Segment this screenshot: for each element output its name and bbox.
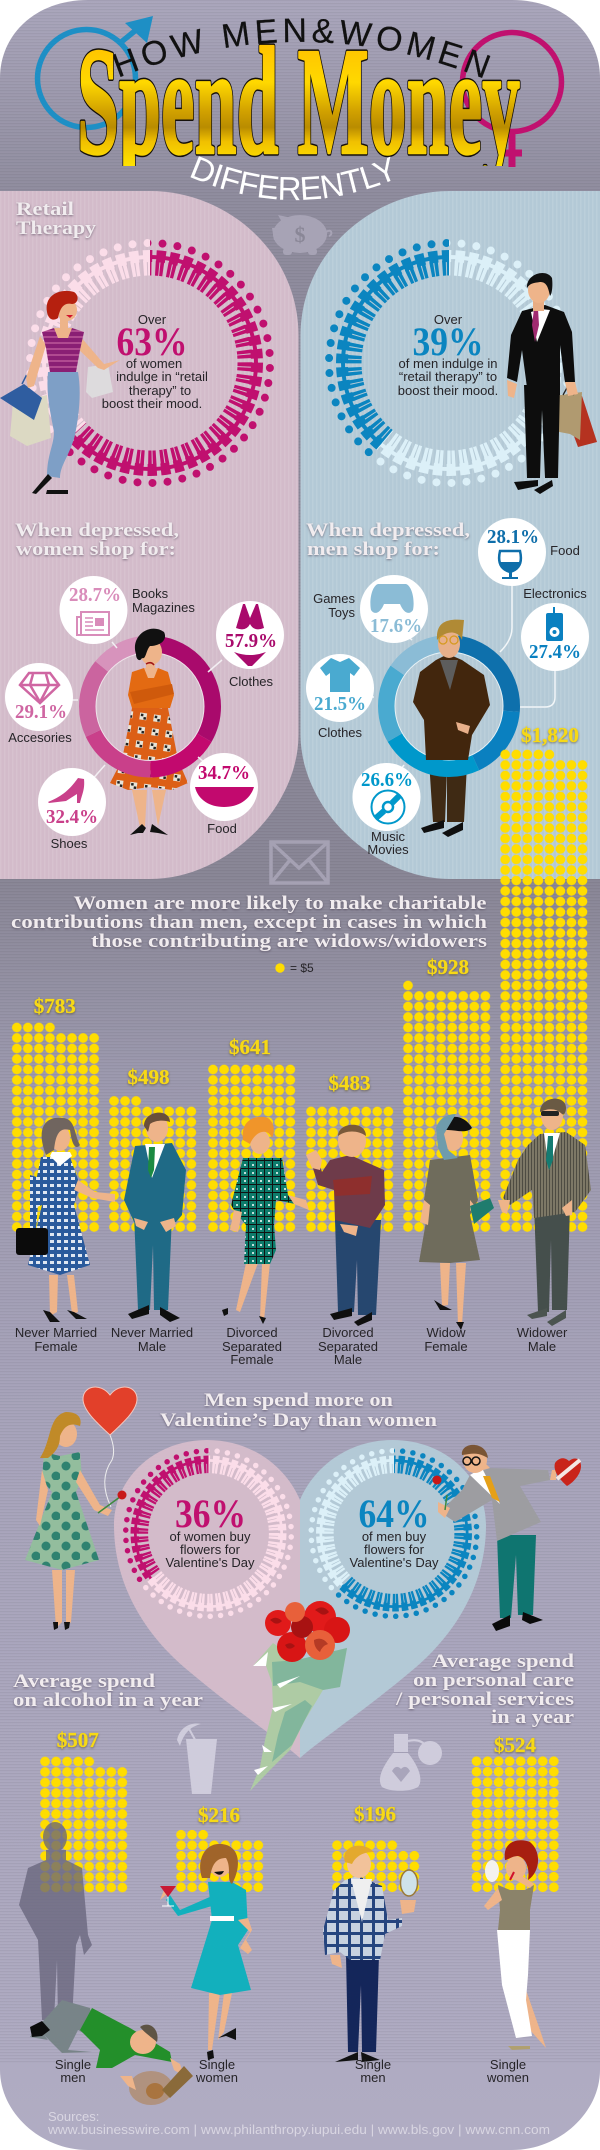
bar: alcohol single men $507: [40, 1728, 128, 1893]
bar: widow female $928: [402, 955, 491, 1232]
connector lines: [70, 642, 222, 782]
bar: widower male $1,820: $1,820: [521, 723, 579, 747]
panel: women (pink): [0, 191, 298, 879]
icon: CD: [372, 790, 404, 824]
bottle: [162, 2066, 193, 2098]
stat: 39% of men: boost their mood.: [398, 383, 498, 398]
heading: women depressed: women shop for:: [16, 539, 176, 560]
shopping bags: [0, 359, 113, 446]
heading: men depressed: When depressed,: [306, 520, 470, 541]
stat: 64% of men: of men buy: [362, 1529, 427, 1544]
figure: drunk man on floor: [30, 2000, 193, 2105]
figure: divorced female: [222, 1117, 309, 1324]
heading: men depressed: [306, 520, 470, 560]
bubble: electronics: Electronics: [523, 586, 587, 601]
connector lines men: [366, 586, 555, 773]
bubble: music and movies: Music: [371, 829, 405, 844]
bubble: games and toys: Toys: [328, 605, 355, 620]
figure: woman shopping: [0, 291, 120, 494]
roses: [265, 1601, 350, 1662]
sources: [47, 2109, 550, 2137]
bubble: clothes (men): Clothes: [318, 725, 363, 740]
bar: divorced male $483: $483: [328, 1071, 370, 1095]
labels: charity groups: Divorced: [322, 1325, 374, 1340]
stat: 63% of women: 63%: [116, 319, 188, 364]
labels: single men and women: women: [486, 2070, 529, 2085]
heading: retail therapy: Retail: [16, 199, 74, 220]
labels: charity groups: Female: [424, 1339, 468, 1354]
icon: bikini: [234, 604, 266, 666]
heart: blue half: [300, 1440, 486, 1758]
stat: 64% of men: flowers for: [364, 1542, 425, 1557]
wrap: [250, 1643, 347, 1791]
heading: women depressed: [15, 520, 179, 560]
figure: depressed man lower body: [421, 745, 468, 837]
stat: 36% of women: Valentine's Day: [166, 1555, 255, 1570]
stat: 63% of women: [102, 312, 208, 411]
figure: valentine woman: [25, 1387, 137, 1630]
bar: personal care single women $524: [471, 1733, 559, 1892]
heading: average spend on personal care: in a year: [491, 1707, 575, 1728]
heading: average spend on alcohol: on alcohol in a year: [13, 1690, 204, 1711]
bar: divorced female $641: $641: [229, 1035, 271, 1059]
bubble: clothes: 57.9%: [225, 630, 277, 652]
heart: pink half: [114, 1440, 300, 1758]
stat: 39% of men: “retail therapy” to: [399, 369, 497, 384]
stat: 63% of women: of women: [126, 356, 182, 371]
bubble: clothes: Clothes: [229, 674, 274, 689]
labels: single men and women: [55, 2057, 529, 2085]
stat: 64% of men: [350, 1491, 439, 1570]
bubble: games and toys: 17.6%: [370, 615, 422, 637]
stat: 39% of men: of men indulge in: [398, 356, 498, 371]
bubble: accessories: [5, 663, 73, 745]
bubble: books and magazines: 28.7%: [69, 584, 121, 606]
chart: 39% of men people ring: [329, 243, 569, 483]
labels: single men and women: men: [360, 2070, 386, 2085]
bubble: shoes: [38, 768, 106, 851]
shopping bags: [549, 386, 597, 447]
bubble: music and movies: [352, 763, 420, 857]
icon: newspaper: [77, 612, 109, 635]
bar: divorced female $641: [208, 1035, 296, 1232]
bar: alcohol single women $216: [176, 1803, 264, 1892]
figure: woman with cocktail: [160, 1844, 252, 2060]
icon: game controller: [370, 584, 414, 613]
sources: www.businesswire.com | www.philanthropy.iupui.edu | www.bls.gov | www.cnn.com: [47, 2122, 550, 2137]
labels: single men and women: Single: [355, 2057, 391, 2072]
labels: charity groups: Male: [138, 1339, 166, 1354]
legend: dot equals $5: [275, 961, 314, 975]
icon: cocktail glass: [177, 1724, 217, 1794]
heading: charitable contributions: [11, 893, 488, 952]
heading: retail therapy: Therapy: [16, 218, 97, 239]
chart: donations dot bars: [11, 723, 588, 1232]
legend: dot equals $5: = $5: [290, 961, 314, 975]
bubble: shoes: 32.4%: [46, 806, 98, 828]
labels: single men and women: Single: [490, 2057, 526, 2072]
labels: single men and women: women: [195, 2070, 238, 2085]
stat: 63% of women: Over: [138, 312, 167, 327]
bubble: food: [190, 753, 258, 836]
bar: widower male $1,820: [500, 723, 588, 1232]
chart: 36% of women people ring: [126, 1451, 291, 1616]
bubble: food: Food: [207, 821, 237, 836]
heading: charitable contributions: contributions than men, except in cases in which: [11, 912, 488, 933]
heading: average spend on personal care: Average spend: [432, 1651, 575, 1672]
bubble: food (men): 28.1%: [487, 526, 539, 548]
figure: never married male: [124, 1113, 186, 1322]
heading: charitable contributions: Women are more likely to make charitable: [74, 893, 486, 914]
bubble: clothes (men): 21.5%: [314, 693, 366, 715]
labels: charity groups: Female: [34, 1339, 78, 1354]
bar: personal care single men $196: [332, 1802, 420, 1892]
bar: widow female $928: $928: [427, 955, 469, 979]
figure: valentine man: [432, 1445, 581, 1631]
title: HOW MEN&WOMEN: [114, 18, 490, 78]
bar: alcohol single men $507: $507: [57, 1728, 99, 1752]
heading: retail therapy: [16, 199, 97, 239]
chart: 63% of women people ring: [30, 243, 270, 483]
figure: man with mirror: [323, 1846, 418, 2062]
bubble: shoes: Shoes: [51, 836, 88, 851]
hand mirror: [400, 1870, 418, 1896]
bubble: music and movies: 26.6%: [361, 769, 413, 791]
stat: 39% of men: [398, 312, 498, 398]
labels: charity groups: Divorced: [226, 1325, 278, 1340]
bubble: accessories: Accesories: [8, 730, 72, 745]
cocktail: [160, 1886, 176, 1906]
stat: 63% of women: boost their mood.: [102, 396, 202, 411]
stat: 64% of men: Valentine's Day: [350, 1555, 439, 1570]
icon: high heel shoe: [48, 778, 84, 803]
heading: average spend on alcohol: [13, 1671, 204, 1711]
figure: man shopping: [507, 273, 597, 494]
sources: Sources:: [48, 2109, 99, 2124]
chart: women donut: [88, 644, 212, 769]
icon: envelope: [271, 842, 328, 883]
bubble: clothes: [216, 601, 284, 689]
figure: shadow man: [19, 1822, 92, 2020]
bubble: books and magazines: [60, 576, 195, 644]
bar: never married male $498: $498: [128, 1065, 170, 1089]
bubble: clothes (men): [306, 654, 374, 740]
bar: divorced male $483: [306, 1071, 394, 1232]
labels: charity groups: Never Married: [15, 1325, 97, 1340]
heading: men depressed: men shop for:: [307, 539, 440, 560]
icon: piggy bank: [272, 215, 331, 255]
bubble: games and toys: Games: [313, 591, 355, 606]
labels: single men and women: Single: [199, 2057, 235, 2072]
icon: glass: [499, 551, 521, 579]
figure: widower male: [498, 1099, 591, 1326]
heading: women depressed: When depressed,: [15, 520, 179, 541]
figure: never married female: [16, 1118, 115, 1322]
bubble: games and toys: [313, 575, 428, 643]
figure: widow female: [419, 1114, 494, 1330]
icon: female symbol: [462, 32, 562, 167]
chart: 64% of men people ring: [311, 1451, 477, 1616]
icon: heart balloon: [83, 1387, 137, 1435]
heading: valentine's day: [160, 1390, 438, 1431]
heading: charitable contributions: those contributing are widows/widowers: [91, 931, 487, 952]
labels: charity groups: Male: [334, 1352, 362, 1367]
stat: 39% of men: Over: [434, 312, 463, 327]
puddle: [129, 2071, 173, 2105]
bar: never married female $783: [11, 994, 100, 1232]
bar: personal care single women $524: $524: [494, 1733, 536, 1757]
bubble: food: 34.7%: [198, 762, 250, 784]
heading: valentine's day: Men spend more on: [204, 1390, 393, 1411]
stat: 64% of men: 64%: [358, 1491, 430, 1536]
labels: charity groups: Widow: [426, 1325, 466, 1340]
figure: woman with lipstick: [484, 1840, 546, 2050]
bar: alcohol single women $216: $216: [198, 1803, 240, 1827]
labels: charity groups: Never Married: [111, 1325, 193, 1340]
stat: 63% of women: therapy” to: [129, 383, 191, 398]
labels: single men and women: men: [60, 2070, 86, 2085]
bar: never married male $498: [108, 1065, 197, 1232]
stat: 36% of women: flowers for: [180, 1542, 241, 1557]
labels: charity groups: Separated: [318, 1339, 378, 1354]
bubble: electronics: 27.4%: [529, 641, 581, 663]
bubble: music and movies: Movies: [367, 842, 409, 857]
figure: depressed woman lower body: [110, 708, 188, 835]
heading: average spend on personal care: [395, 1651, 575, 1728]
bar: personal care single men $196: $196: [354, 1802, 396, 1826]
heading: average spend on personal care: on personal care: [413, 1670, 574, 1691]
labels: charity groups: Widower: [517, 1325, 568, 1340]
chart: alcohol and personal care dot bars: [40, 1728, 559, 1893]
labels: charity groups: Male: [528, 1339, 556, 1354]
heading: average spend on alcohol: Average spend: [13, 1671, 156, 1692]
bubble: food (men): [478, 518, 580, 586]
chart: men donut: [386, 644, 512, 768]
figure: depressed man upper body: [413, 620, 490, 760]
bubble: accessories: 29.1%: [15, 701, 67, 723]
labels: single men and women: Single: [55, 2057, 91, 2072]
panel: men (blue): [300, 191, 600, 879]
stat: 36% of women: of women buy: [170, 1529, 251, 1544]
bubble: electronics: [521, 586, 589, 671]
icon: diamond: [20, 673, 59, 703]
bubble: books and magazines: Books: [132, 586, 169, 601]
heading: average spend on personal care: / personal services: [395, 1689, 574, 1710]
bubble: food (men): Food: [550, 543, 580, 558]
icon: t-shirt: [320, 658, 360, 692]
icon: heart chocolate box: [555, 1458, 581, 1486]
stat: 36% of women: 36%: [175, 1491, 246, 1536]
stat: 36% of women: [166, 1491, 255, 1570]
icon: male symbol: [38, 16, 153, 128]
labels: charity groups: Separated: [222, 1339, 282, 1354]
bubble: books and magazines: Magazines: [132, 600, 195, 615]
labels: charity groups: [15, 1325, 568, 1367]
stat: 63% of women: indulge in “retail: [116, 369, 208, 384]
labels: charity groups: Female: [230, 1352, 274, 1367]
stat: 39% of men: 39%: [412, 319, 484, 364]
icon: piggy bank: $: [294, 222, 306, 247]
figure: depressed woman upper body: [128, 629, 174, 708]
icon: mp3 player: [546, 607, 563, 641]
figure: divorced male: [306, 1125, 385, 1326]
icon: perfume bottle: [380, 1734, 442, 1791]
illustration: bouquet of roses: [250, 1601, 350, 1791]
icon: watermelon: [195, 787, 254, 807]
heading: valentine's day: Valentine’s Day than women: [160, 1410, 438, 1431]
title: DIFFERENTLY: [190, 156, 390, 200]
bar: never married female $783: $783: [34, 994, 76, 1018]
